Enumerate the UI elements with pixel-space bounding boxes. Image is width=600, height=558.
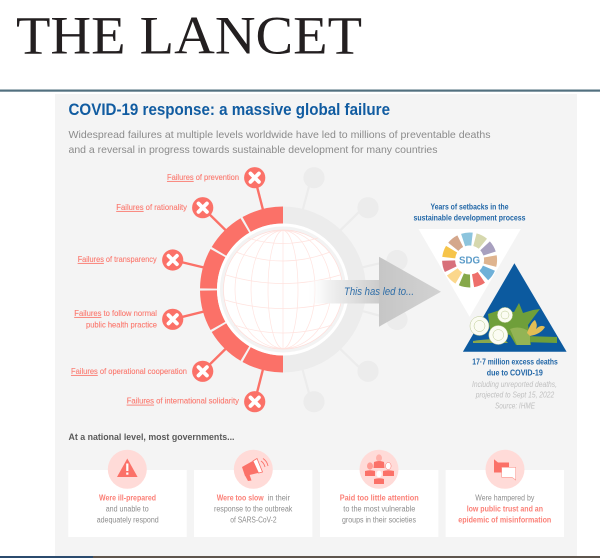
failure: operational cooperation: Failures of operational cooperation — [71, 367, 187, 376]
white triangle with SDG wheel: SDG — [459, 256, 480, 266]
grey half of virus ring with spokes — [283, 167, 408, 412]
failure: prevention — [167, 167, 283, 224]
card: too slow: response to the outbreak — [214, 504, 293, 514]
card: ill-prepared: and unable to — [106, 504, 149, 514]
subtitle: and a reversal in progress towards sustainable development for many countries — [68, 144, 438, 156]
failure: normal public health practice — [74, 291, 218, 330]
subtitle: Widespread failures at multiple levels worldwide have led to millions of preventable deaths — [68, 129, 491, 141]
card: too slow: Were too slow — [217, 494, 264, 502]
subtitle — [68, 129, 491, 156]
panel: infographic background — [55, 94, 577, 556]
text: excess deaths: Source: IHME — [495, 402, 536, 411]
failure: normal public health practice: public health practice — [86, 320, 158, 330]
card: too little attention: groups in their societies — [342, 516, 416, 524]
heading: years of setbacks — [414, 202, 526, 222]
card: ill-prepared: adequately respond — [97, 516, 159, 524]
heading: national level: At a national level, most governments... — [68, 432, 234, 443]
arrow: this has led to — [305, 257, 441, 327]
icon: megaphone — [242, 458, 268, 481]
failure: operational cooperation — [71, 328, 245, 382]
icon: warning triangle — [117, 458, 138, 477]
arrow: this has led to: This has led to... — [344, 286, 414, 298]
card: low public trust: epidemic of misinformation — [458, 516, 551, 524]
title: COVID-19 response: a massive global failure — [68, 100, 390, 119]
failure: rationality: Failures of rationality — [116, 203, 187, 212]
card: ill-prepared: Were ill-prepared — [99, 494, 156, 502]
text: excess deaths: due to COVID-19 — [487, 369, 543, 378]
text: excess deaths: projected to Sept 15, 2022 — [475, 390, 555, 400]
card: too little attention: to the most vulnerable — [343, 504, 416, 514]
icon: people group — [365, 454, 394, 484]
failure: rationality — [116, 197, 245, 251]
failure: prevention: Failures of prevention — [167, 173, 239, 182]
text: excess deaths: 17·7 million excess deaths — [472, 358, 558, 367]
heading: years of setbacks: sustainable development process — [414, 214, 526, 222]
failure: transparency: Failures of transparency — [78, 255, 157, 264]
failure: international solidarity: Failures of international solidarity — [127, 397, 239, 406]
card: low public trust: low public trust and an — [467, 504, 543, 514]
failure: normal public health practice: Failures to follow normal — [74, 309, 157, 318]
card: too slow: in their — [268, 494, 290, 502]
masthead: The Lancet logo: THE LANCET — [16, 6, 362, 66]
heading: years of setbacks: Years of setbacks in the — [430, 202, 509, 212]
bottom strip — [0, 556, 600, 558]
header rule — [0, 90, 600, 92]
card: low public trust: Were hampered by — [475, 494, 534, 502]
card: low public trust — [446, 450, 564, 537]
icon: flag and speech bubble — [494, 459, 516, 480]
card: too slow — [194, 450, 312, 537]
card: ill-prepared — [68, 450, 187, 537]
white triangle with SDG wheel — [418, 229, 521, 317]
failure: international solidarity — [127, 355, 283, 412]
card: too little attention — [320, 450, 438, 537]
failure: transparency — [78, 249, 218, 288]
globe — [217, 224, 349, 356]
text: excess deaths — [472, 358, 558, 411]
text: excess deaths: Including unreported deaths, — [472, 380, 557, 389]
card: too slow: of SARS-CoV-2 — [230, 516, 277, 524]
card: too little attention: Paid too little attention — [340, 494, 419, 502]
blue triangle with flowers — [463, 263, 567, 352]
